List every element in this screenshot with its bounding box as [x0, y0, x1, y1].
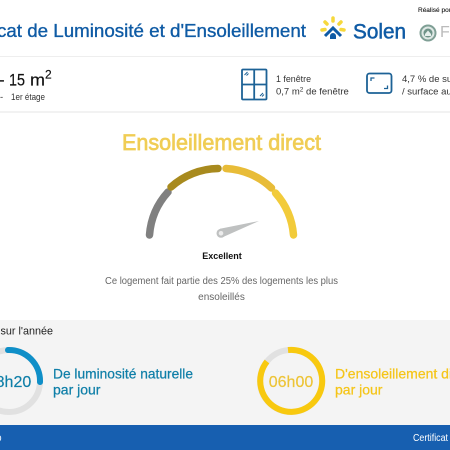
luminosity label: De luminosité naturelle	[53, 366, 193, 382]
surface value: m	[30, 70, 45, 90]
gauge segment: good	[226, 168, 272, 188]
floor label: 1er étage	[11, 92, 45, 103]
surface value: 15	[9, 70, 25, 90]
gauge segment: poor	[150, 192, 168, 235]
floor label: -	[0, 92, 3, 103]
heading: Ensoleillement direct: Ensoleillement direct	[122, 130, 321, 155]
window text: 0,7 m	[276, 86, 300, 98]
needle	[216, 221, 259, 238]
luminosity ring	[0, 350, 40, 412]
description: Ce logement fait partie des 25% des logements les plus	[105, 276, 338, 287]
sunshine ring	[260, 350, 322, 412]
surface value: 2	[45, 68, 52, 82]
luminosity label: par jour	[53, 382, 101, 398]
panel: sur l'année	[0, 320, 450, 425]
gauge segment: excellent	[276, 193, 294, 235]
icon: surface ratio	[367, 74, 392, 93]
icon: window	[242, 70, 266, 100]
sunshine ring: 06h00	[269, 374, 313, 391]
window text: 2	[300, 86, 304, 94]
window text: 1 fenêtre	[276, 74, 311, 85]
panel heading: sur l'année	[0, 326, 53, 338]
logo: Solen	[322, 18, 406, 44]
gauge segment: medium	[171, 168, 218, 187]
credit: réalisé pour	[418, 7, 450, 41]
window info	[242, 70, 349, 100]
window text: de fenêtre	[303, 86, 349, 98]
gauge	[150, 168, 294, 238]
window ratio info	[367, 74, 450, 98]
footer bar	[0, 425, 450, 450]
gauge label: Excellent	[202, 251, 242, 261]
wordmark: Solen	[353, 20, 406, 44]
surface info	[0, 68, 52, 103]
sunshine label: par jour	[335, 382, 383, 398]
icon: sun and house	[322, 18, 344, 39]
description: ensoleillés	[198, 292, 245, 303]
